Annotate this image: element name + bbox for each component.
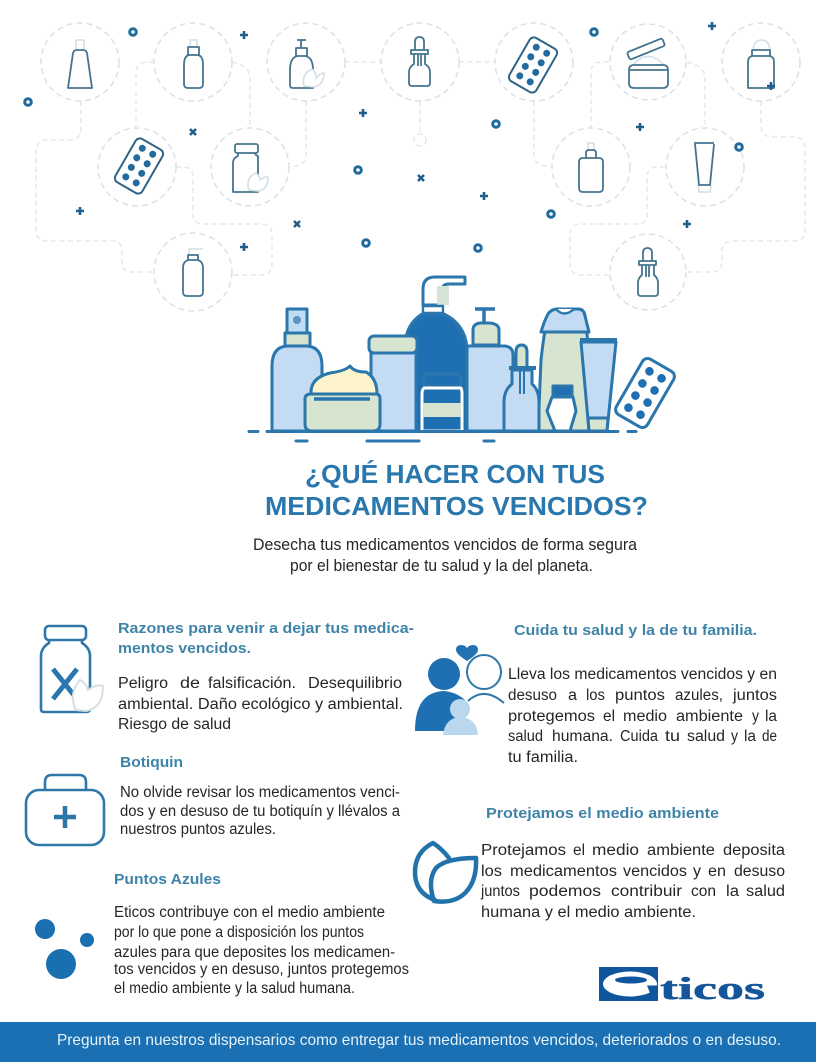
- text: cuida: ambiente: [676, 708, 743, 725]
- text: botiquin: nuestros puntos azules.: [120, 821, 276, 838]
- text: cuida: Lleva los medicamentos vencidos y en: [508, 666, 777, 683]
- text: protejamos: deposita: [723, 842, 785, 859]
- subtitle: Desecha tus medicamentos vencidos de forma segura: [253, 536, 638, 554]
- logo: eticos: ticos: [660, 970, 765, 1006]
- product: dark pump bottle: [405, 277, 467, 431]
- text: puntos azules: Eticos contribuye con el medio ambiente: [114, 904, 385, 921]
- text: razones: Desequilibrio: [308, 675, 402, 692]
- text: cuida: de: [762, 728, 777, 745]
- panel: botiquin: [26, 754, 400, 845]
- icon: blue dots: [35, 919, 94, 979]
- text: cuida: salud: [687, 728, 725, 745]
- text: cuida: tu familia.: [508, 749, 578, 766]
- text: cuida: juntos: [732, 687, 777, 704]
- illustration: medicine products: [249, 277, 677, 441]
- text: razones: falsificación.: [208, 675, 296, 692]
- text: cuida: el: [603, 708, 615, 725]
- text: protejamos: en: [708, 863, 726, 880]
- heading: cuida: Cuida tu salud y la de tu familia.: [514, 622, 757, 639]
- product: small dark jar: [422, 374, 462, 431]
- text: cuida: puntos: [615, 687, 665, 704]
- panel: puntos azules: [35, 871, 409, 997]
- text: cuida: Cuida: [620, 728, 658, 745]
- icon: medical kit: [26, 775, 104, 845]
- icon: squeeze tube: [694, 143, 714, 192]
- text: botiquin: [120, 784, 400, 838]
- text: cuida: medio: [623, 708, 667, 725]
- product: small white bottle: [547, 386, 576, 431]
- heading: puntos azules: Puntos Azules: [114, 871, 221, 888]
- icon: pump bottle with leaf: [290, 40, 324, 88]
- product: cream jar: [305, 366, 380, 431]
- text: protejamos: los: [481, 863, 502, 880]
- text: cuida: y: [731, 728, 738, 745]
- icon: blister pack: [113, 137, 165, 195]
- dashed icon circles: [41, 23, 800, 311]
- text: puntos azules: el medio ambiente y la salud humana.: [114, 980, 355, 997]
- text: protejamos: Protejamos: [481, 842, 566, 859]
- ground lines: [249, 432, 636, 441]
- text: botiquin: dos y en desuso de tu botiquín y llévalos a: [120, 803, 400, 820]
- heading: botiquin: Botiquin: [120, 754, 183, 771]
- icon: pump bottle: [183, 249, 203, 296]
- text: puntos azules: [114, 904, 409, 997]
- text: cuida: la: [765, 708, 777, 725]
- decorative ring dots: [25, 29, 742, 251]
- text: protejamos: vencidos: [623, 863, 687, 880]
- product: spray bottle: [272, 309, 322, 431]
- icon: tube: [68, 40, 92, 88]
- text: protejamos: el: [573, 842, 585, 859]
- text: cuida: salud: [508, 728, 543, 745]
- text: protejamos: medicamentos: [510, 863, 617, 880]
- icon: leaves: [415, 843, 476, 902]
- text: protejamos: contribuir: [611, 883, 682, 900]
- icon: open cream jar: [627, 38, 668, 88]
- text: puntos azules: azules para que deposites los medicamen-: [114, 944, 395, 961]
- product: pump bottle light: [467, 309, 513, 431]
- text: protejamos: medio: [592, 842, 639, 859]
- text: puntos azules: por lo que pone a disposición los puntos: [114, 924, 364, 941]
- text: cuida: a: [568, 687, 577, 704]
- text: protejamos: salud: [746, 883, 785, 900]
- text: botiquin: No olvide revisar los medicamentos venci-: [120, 784, 400, 801]
- icon: jar with leaf: [233, 144, 268, 192]
- text: protejamos: juntos: [480, 883, 520, 900]
- text: razones: [118, 675, 403, 733]
- text: cuida: tu: [665, 728, 680, 745]
- icon: blister pack: [507, 36, 559, 94]
- logo: eticos: [599, 967, 765, 1006]
- text: puntos azules: tos vencidos y en desuso, juntos protegemos: [114, 961, 409, 978]
- product: dropper bottle: [504, 345, 539, 431]
- icon: bottle: [184, 40, 203, 88]
- text: protejamos: humana y el medio ambiente.: [481, 904, 696, 921]
- text: cuida: [508, 666, 777, 766]
- title: ¿QUÉ HACER CON TUS: [305, 459, 605, 489]
- text: protejamos: la: [726, 883, 739, 900]
- icon: flat bottle: [579, 143, 603, 192]
- text: razones: Peligro: [118, 675, 168, 692]
- title: [265, 459, 648, 521]
- subtitle: por el bienestar de tu salud y la del planeta.: [290, 557, 593, 575]
- text: cuida: azules,: [675, 687, 723, 704]
- title: MEDICAMENTOS VENCIDOS?: [265, 491, 648, 521]
- heading: razones: [118, 620, 414, 657]
- icon: roll-on: [748, 40, 775, 90]
- icon: dropper bottle: [638, 248, 658, 296]
- footer banner: Pregunta en nuestros dispensarios como entregar tus medicamentos vencidos, deteriorados o en desuso.: [57, 1032, 781, 1049]
- text: cuida: los: [586, 687, 605, 704]
- text: razones: ambiental. Daño ecológico y ambiental.: [118, 696, 403, 713]
- product: shampoo bottle: [538, 309, 590, 431]
- heading: protejamos: Protejamos el medio ambiente: [486, 805, 719, 822]
- text: cuida: y: [752, 708, 759, 725]
- subtitle: [253, 536, 638, 575]
- text: cuida: la: [744, 728, 756, 745]
- icon: bottle with X: [41, 626, 103, 712]
- icon: family: [415, 645, 504, 735]
- decorative plus marks: [76, 22, 716, 251]
- text: cuida: desuso: [508, 687, 557, 704]
- text: cuida: protegemos: [508, 708, 595, 725]
- heading: razones: Razones para venir a dejar tus medica-: [118, 620, 414, 637]
- panel: protejamos: [415, 805, 785, 921]
- text: protejamos: ambiente: [647, 842, 715, 859]
- panel: cuida tu salud: [415, 622, 777, 766]
- product: large jar: [369, 336, 417, 431]
- text: razones: Riesgo de salud: [118, 716, 231, 733]
- product: blister pack: [613, 356, 677, 430]
- connector network: [36, 62, 805, 275]
- text: protejamos: podemos: [529, 883, 601, 900]
- panel: razones: [41, 620, 414, 733]
- text: protejamos: [480, 842, 785, 921]
- text: protejamos: y: [693, 863, 701, 880]
- product: tube: [580, 340, 617, 431]
- text: protejamos: con: [691, 883, 716, 900]
- text: protejamos: desuso: [734, 863, 785, 880]
- text: cuida: humana.: [552, 728, 613, 745]
- heading: razones: mentos vencidos.: [118, 640, 251, 657]
- text: razones: de: [180, 675, 200, 692]
- decorative cross marks: [190, 129, 424, 227]
- footer banner: [0, 1022, 816, 1062]
- icon: dropper bottle: [409, 37, 430, 86]
